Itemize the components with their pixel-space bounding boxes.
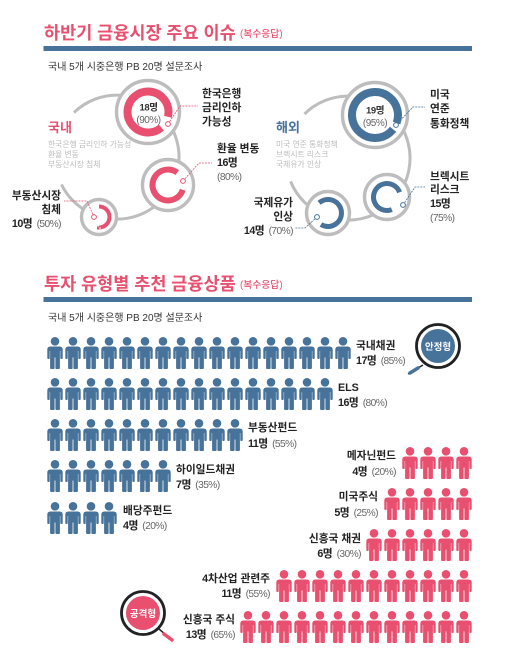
heading: 투자 유형별 추천 금융상품 xyxy=(44,274,472,302)
label: 미국 연준 통화정책 xyxy=(394,88,469,130)
label: 국내채권: 국내채권 xyxy=(356,339,395,352)
label: 부동산시장 침체: 10명 (50%) xyxy=(12,214,61,231)
label: 브렉시트 리스크: (75%) xyxy=(430,213,455,224)
survey note: 국내 5개 시중은행 PB 20명 설문조사 xyxy=(48,312,202,324)
label: 배당주펀드 xyxy=(123,504,172,533)
label: 신흥국 채권 xyxy=(309,532,361,561)
pictogram row: 미국주식 5명 xyxy=(384,488,472,520)
label: 부동산시장 침체 xyxy=(12,189,96,231)
donut: 14명 70% xyxy=(306,192,350,234)
pictogram row: ELS 16명 xyxy=(47,378,333,410)
label: 환율 변동 xyxy=(181,142,259,183)
label: 메자닌펀드: 4명 (20%) xyxy=(352,462,396,479)
pictogram row: 부동산펀드 11명 xyxy=(47,419,243,451)
heading: 투자 유형별 추천 금융상품: 투자 유형별 추천 금융상품 xyxy=(44,274,236,294)
label: 브렉시트 리스크: 리스크 xyxy=(430,183,460,196)
icon: magnifier 공격형: 공격형 xyxy=(130,608,156,620)
label: 국제유가 인상: 14명 (70%) xyxy=(244,221,293,238)
label: 부동산시장 침체: 부동산시장 xyxy=(12,189,61,202)
donut: 19명 95%: 19명 xyxy=(366,104,384,116)
pictogram row: 신흥국 주식 13명 xyxy=(240,611,472,643)
label: 신흥국 주식: 13명 (65%) xyxy=(186,625,235,642)
label: 환율 변동: (80%) xyxy=(217,172,242,183)
label: 한국은행 금리인하 가능성: 가능성 xyxy=(202,115,232,128)
donut: 15명 75% xyxy=(364,174,410,220)
pictogram row: 신흥국 채권 6명 xyxy=(366,529,472,561)
donut: 10명 50% xyxy=(82,200,116,234)
heading: 하반기 금융시장 주요 이슈: 하반기 금융시장 주요 이슈 xyxy=(44,23,236,43)
pictogram row: 메자닌펀드 4명 xyxy=(402,447,472,479)
label: 브렉시트 리스크: 브렉시트 xyxy=(430,171,469,183)
label: 국내채권: 17명 (85%) xyxy=(356,351,405,368)
donut: 19명 95%: (95%) xyxy=(363,118,387,129)
domestic issue list xyxy=(48,139,131,169)
label: ELS xyxy=(338,382,387,410)
heading: 하반기 금융시장 주요 이슈: (복수응답) xyxy=(240,27,283,40)
label: 4차산업 관련주 xyxy=(202,572,270,601)
donut: 19명 95% xyxy=(342,82,408,148)
donut: 18명 90%: 18명 xyxy=(139,102,158,114)
label: 신흥국 주식 xyxy=(183,613,235,642)
icon: magnifier 공격형 xyxy=(122,592,173,641)
label: 4차산업 관련주: 11명 (55%) xyxy=(221,584,270,601)
label: 국제유가 인상: 국제유가 xyxy=(254,196,293,209)
pictogram row: 배당주펀드 4명 xyxy=(47,502,117,534)
heading: 하반기 금융시장 주요 이슈 xyxy=(44,23,472,51)
overseas issue list: 국제유가 인상 xyxy=(276,159,321,169)
overseas issue list: 미국 연준 통화정책 xyxy=(276,139,338,149)
icon: magnifier 안정형: 안정형 xyxy=(425,341,451,353)
label: 메자닌펀드: 메자닌펀드 xyxy=(347,449,396,462)
label: 국내채권 xyxy=(356,339,405,368)
label: 4차산업 관련주: 4차산업 관련주 xyxy=(202,572,270,585)
label: 미국 연준 통화정책: 통화정책 xyxy=(430,117,469,130)
heading: 국내: 국내 xyxy=(48,120,72,135)
label: 국제유가 인상 xyxy=(244,196,319,238)
pictogram row: 국내채권 17명 xyxy=(47,337,351,369)
connecting arc: overseas xyxy=(291,96,410,220)
label: 국제유가 인상: 인상 xyxy=(273,210,293,223)
icon: magnifier 안정형 xyxy=(408,324,460,374)
label: 환율 변동: 환율 변동 xyxy=(217,142,259,155)
label: 미국주식: 미국주식 xyxy=(339,490,378,503)
overseas issue list: 브렉시트 리스크 xyxy=(276,149,328,159)
heading: 투자 유형별 추천 금융상품: (복수응답) xyxy=(240,278,283,291)
label: 부동산펀드: 부동산펀드 xyxy=(248,421,297,434)
label: 신흥국 채권: 6명 (30%) xyxy=(317,544,361,561)
label: 환율 변동: 16명 xyxy=(217,157,237,169)
label: ELS: ELS xyxy=(338,382,359,394)
survey note: 국내 5개 시중은행 PB 20명 설문조사 xyxy=(48,61,202,73)
label: 배당주펀드: 4명 (20%) xyxy=(123,516,167,533)
label: 하이일드채권: 7명 (35%) xyxy=(176,475,220,492)
panel: overseas issues xyxy=(244,82,469,238)
label: 미국주식 xyxy=(334,490,378,520)
domestic issue list: 부동산시장 침체 xyxy=(48,159,100,169)
label: 배당주펀드: 배당주펀드 xyxy=(123,504,172,517)
label: 신흥국 주식: 신흥국 주식 xyxy=(183,613,235,626)
label: 미국주식: 5명 (25%) xyxy=(334,503,378,520)
donut: 18명 90% xyxy=(116,80,180,144)
label: 신흥국 채권: 신흥국 채권 xyxy=(309,532,361,545)
donut: 18명 90%: (90%) xyxy=(136,115,161,126)
label: 한국은행 금리인하 가능성: 금리인하 xyxy=(202,101,241,114)
pictogram row: 4차산업 관련주 11명 xyxy=(276,570,472,602)
pictogram row: 하이일드채권 7명 xyxy=(47,460,171,492)
label: 미국 연준 통화정책: 미국 xyxy=(430,88,450,101)
label: 브렉시트 리스크 xyxy=(401,171,469,224)
label: 부동산펀드: 11명 (55%) xyxy=(248,434,297,451)
label: 미국 연준 통화정책: 연준 xyxy=(430,102,450,115)
donut: 16명 80% xyxy=(142,160,194,210)
label: 하이일드채권: 하이일드채권 xyxy=(176,463,235,476)
label: ELS: 16명 (80%) xyxy=(338,393,387,410)
connecting arc: domestic xyxy=(61,95,179,219)
domestic issue list: 한국은행 금리인하 가능성 xyxy=(48,139,131,149)
panel: domestic issues xyxy=(12,80,259,234)
heading: 해외: 해외 xyxy=(276,120,300,135)
overseas issue list xyxy=(276,139,338,169)
label: 한국은행 금리인하 가능성 xyxy=(166,87,241,128)
domestic issue list: 환율 변동 xyxy=(48,149,79,159)
label: 하이일드채권 xyxy=(176,463,235,492)
label: 브렉시트 리스크: 15명 xyxy=(430,198,450,210)
label: 부동산펀드 xyxy=(248,421,297,451)
label: 메자닌펀드 xyxy=(347,449,396,479)
label: 부동산시장 침체: 침체 xyxy=(41,203,61,216)
label: 한국은행 금리인하 가능성: 한국은행 xyxy=(202,87,241,100)
